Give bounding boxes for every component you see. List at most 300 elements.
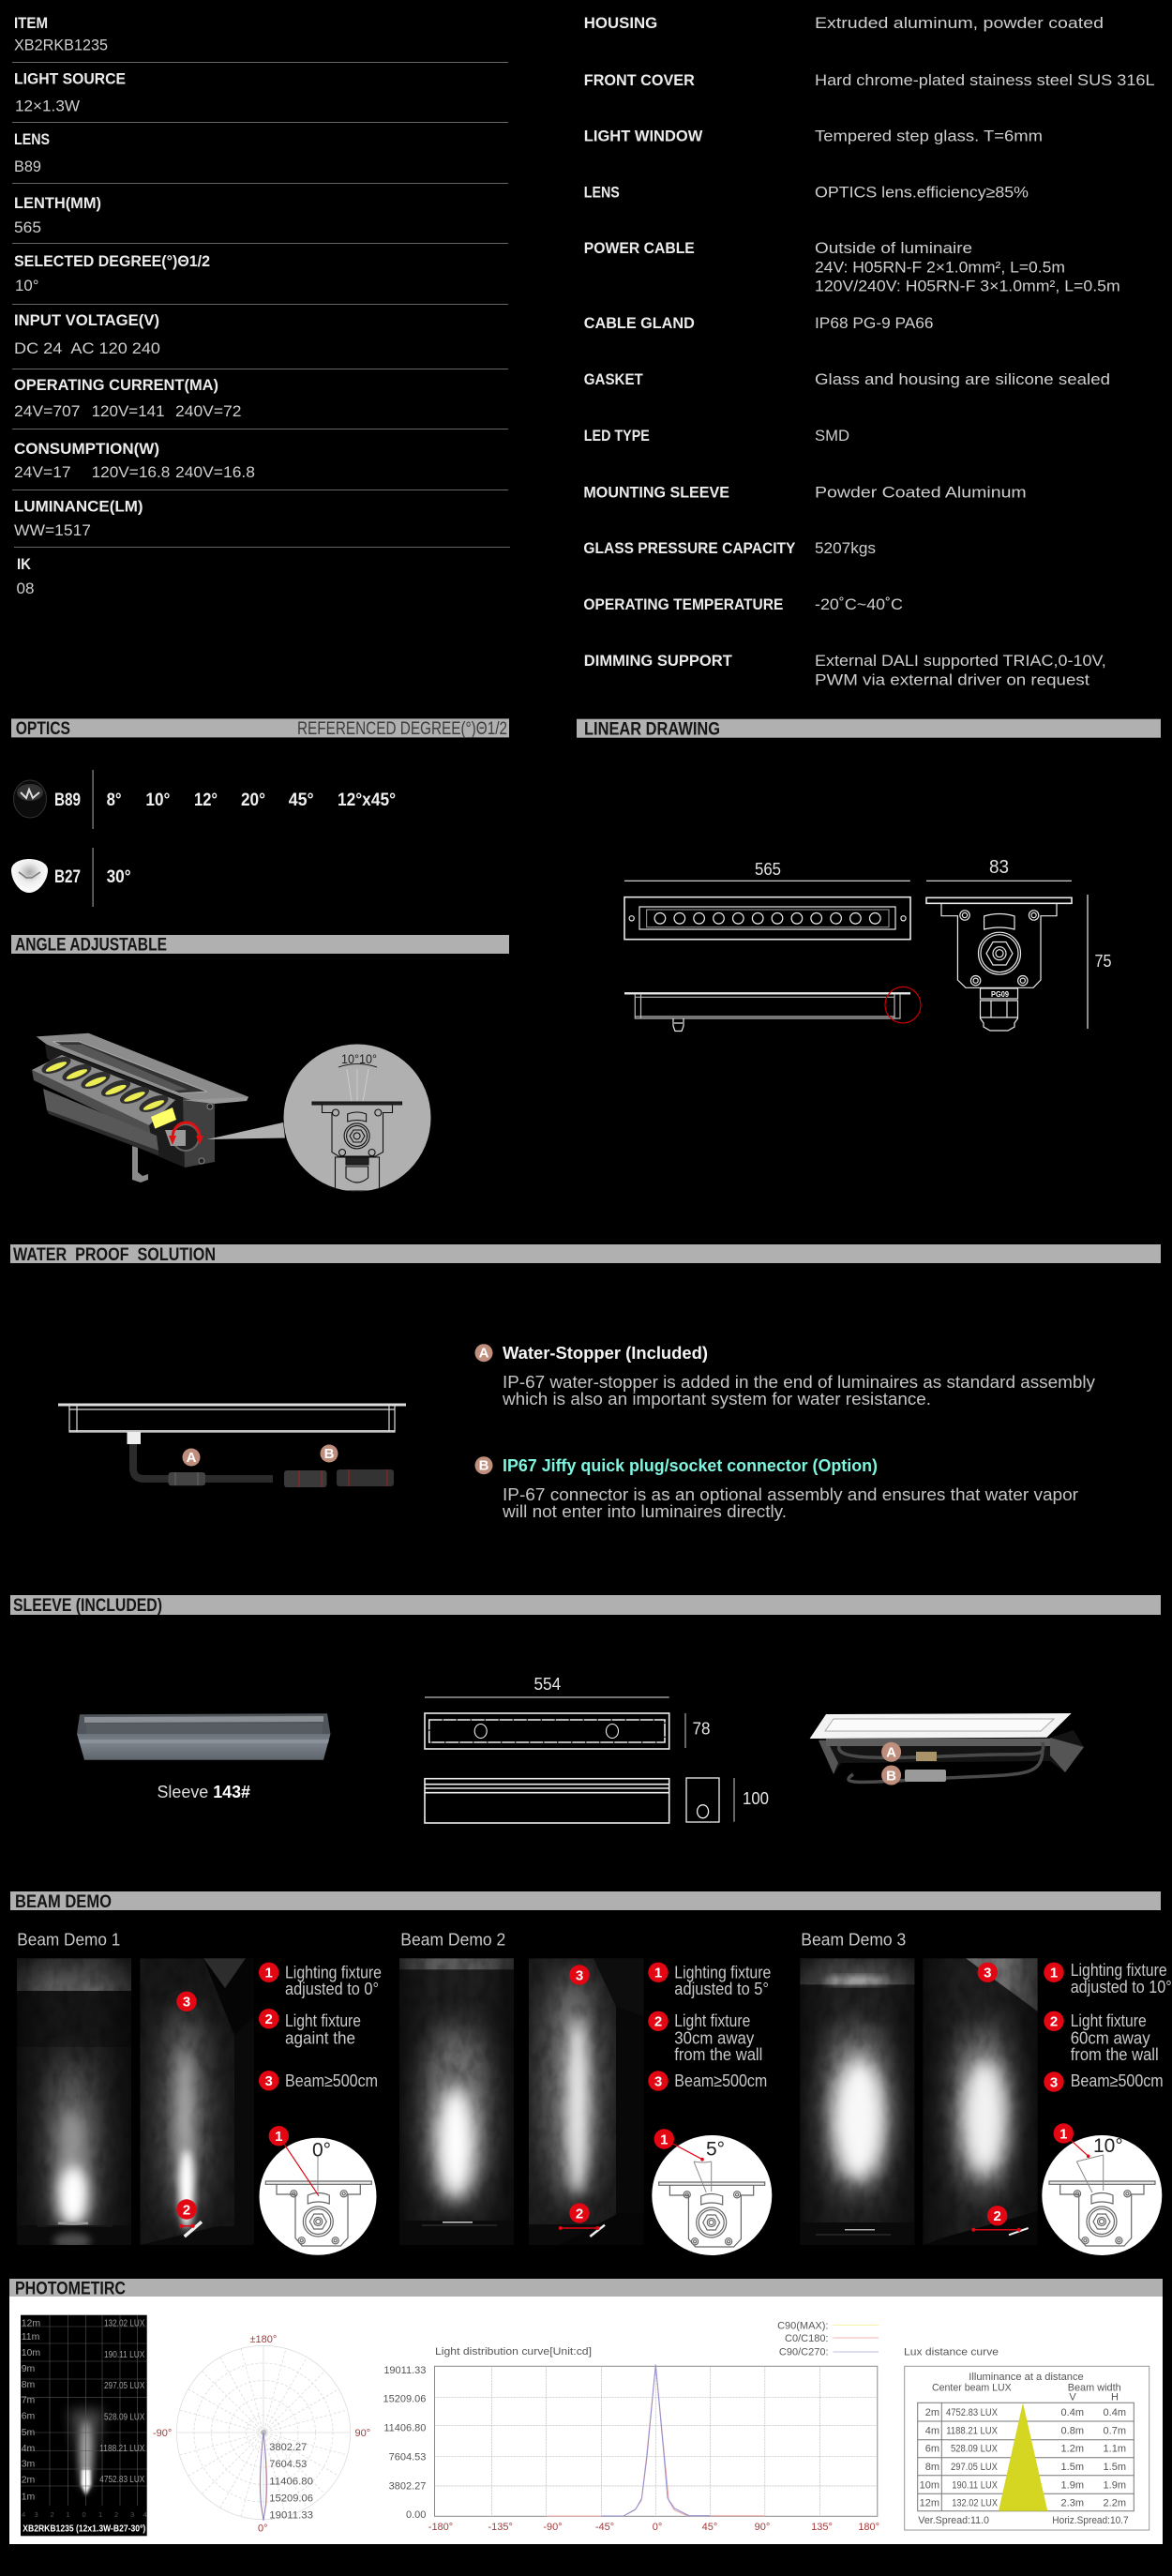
chart: lux distance curve: Beam width <box>1068 2382 1121 2393</box>
B89 angles <box>107 791 396 810</box>
chart: light distribution curve: 0° <box>653 2522 662 2533</box>
bullet 3: 3 <box>265 2073 273 2089</box>
callout: detail circle <box>283 1045 431 1191</box>
callout: angle dial 0 degrees: 1 <box>275 2129 282 2145</box>
B89 angles: 45° <box>289 791 314 810</box>
heading: Beam Demo 1 <box>17 1930 120 1949</box>
bullet 1: Lighting fixture <box>285 1964 382 1982</box>
callout: angle dial 0 degrees <box>259 2126 377 2255</box>
gasket <box>584 370 1110 388</box>
lux table values: 1.9m <box>1061 2479 1084 2491</box>
heading bar: beam demo <box>10 1891 1161 1912</box>
photo: front wall <box>399 1958 514 2245</box>
led type <box>584 427 849 444</box>
B89 angles: 8° <box>107 791 122 810</box>
chart: light distribution curve: -45° <box>595 2522 614 2533</box>
operating temperature <box>583 595 903 613</box>
ik <box>17 555 34 597</box>
chart: beam spread image: 132.02 LUX <box>104 2318 144 2329</box>
lux table values: 2.2m <box>1104 2498 1126 2509</box>
callout: angle dial 5 degrees: 5° <box>706 2138 725 2161</box>
length <box>14 194 101 236</box>
dimension: 100: 100 <box>743 1789 769 1808</box>
cable gland <box>584 314 934 332</box>
photo: front wall <box>17 1958 131 2250</box>
drawing: side view <box>624 987 921 1032</box>
photo: side wall <box>140 1958 254 2245</box>
lux table values <box>920 2407 1126 2509</box>
chart: lux distance curve: V <box>1069 2392 1076 2403</box>
bullet 2 <box>648 2011 762 2064</box>
heading bar: sleeve <box>10 1595 1161 1616</box>
bullet 2: 2 <box>654 2014 662 2030</box>
chart: light distribution curve <box>383 2320 879 2533</box>
heading bar: optics <box>11 718 509 739</box>
legend: C0/C180: <box>785 2333 829 2344</box>
lux table values: 4m <box>925 2425 939 2436</box>
chart: beam spread image: 6m <box>22 2410 36 2421</box>
bullet 3 <box>1044 2071 1164 2092</box>
bullet 2: 30cm away <box>674 2028 754 2047</box>
chart: lux distance curve: H <box>1111 2392 1119 2403</box>
housing <box>584 14 1104 32</box>
chart: beam spread image: 9m <box>22 2363 36 2374</box>
chart: lux distance curve: Lux distance curve <box>904 2346 999 2358</box>
bullet 2: againt the <box>285 2028 355 2047</box>
heading bar: angle adjustable: ANGLE ADJUSTABLE <box>15 936 167 955</box>
chart: light distribution curve: 135° <box>811 2522 833 2533</box>
dimension: 554: 554 <box>534 1675 561 1694</box>
item B: quick plug connector: B <box>479 1457 489 1474</box>
chart: light distribution curve: -180° <box>428 2522 453 2533</box>
chart: light distribution curve: 45° <box>702 2522 717 2533</box>
ik: 08 <box>17 580 34 597</box>
chart: polar distribution: 0° <box>258 2523 268 2534</box>
luminance: WW=1517 <box>14 521 91 539</box>
lux table values: 1.2m <box>1061 2444 1084 2455</box>
heading bar: photometric <box>9 2279 1163 2299</box>
badge A <box>182 1448 201 1467</box>
glass pressure capacity: 5207kgs <box>815 539 876 557</box>
chart: beam spread image <box>21 2315 147 2536</box>
cable gland: IP68 PG-9 PA66 <box>815 314 934 332</box>
lux table values: 12m <box>920 2498 939 2509</box>
icon: fixture 3D view <box>32 1033 248 1183</box>
dimension: 78: 78 <box>692 1720 711 1739</box>
photo: side wall <box>923 1958 1038 2245</box>
bullet 2: 2 <box>1050 2014 1058 2030</box>
length: 565 <box>14 218 41 236</box>
lens <box>584 184 1029 201</box>
badge A: A <box>886 1744 896 1761</box>
dimming support: External DALI supported TRIAC,0-10V, <box>815 652 1106 670</box>
image: assembled fixture in sleeve <box>810 1713 1084 1785</box>
photo markers: 2 <box>576 2206 583 2222</box>
operating current: OPERATING CURRENT(MA) <box>14 376 218 394</box>
drawing: section view <box>926 897 1072 1031</box>
chart: light distribution curve: 11406.80 <box>383 2422 426 2433</box>
chart: light distribution curve: 19011.33 <box>383 2365 426 2376</box>
consumption: 24V=17 <box>14 463 71 481</box>
heading bar: photometric: PHOTOMETIRC <box>15 2279 126 2299</box>
operating temperature: -20˚C~40˚C <box>815 595 903 613</box>
light source <box>14 69 126 114</box>
callout: angle dial 10 degrees: 1 <box>1059 2126 1067 2142</box>
lux table values: 0.4m <box>1104 2407 1126 2418</box>
item A: water stopper: Water-Stopper (Included) <box>503 1344 708 1363</box>
lux table values: 2m <box>925 2407 939 2418</box>
operating temperature: OPERATING TEMPERATURE <box>583 595 783 613</box>
lux table values: 10m <box>920 2479 939 2491</box>
item A: water stopper: A <box>479 1345 489 1362</box>
length: LENTH(MM) <box>14 194 101 212</box>
photo markers <box>569 1965 590 2223</box>
chart: beam spread image: 2m <box>22 2474 36 2485</box>
selected degree: SELECTED DEGREE(°)Θ1/2 <box>14 252 210 270</box>
bullet 1 <box>648 1963 771 1998</box>
heading bar: beam demo: BEAM DEMO <box>15 1892 112 1912</box>
photo markers: 3 <box>576 1967 583 1983</box>
chart: polar distribution: 15209.06 <box>269 2493 313 2505</box>
lux table values: 2.3m <box>1061 2498 1084 2509</box>
item B: quick plug connector: will not enter into luminaires directly. <box>502 1502 787 1521</box>
selected degree <box>14 252 210 294</box>
chart: beam spread image: 2 <box>51 2510 54 2519</box>
bullet 3: 3 <box>654 2073 662 2089</box>
light window <box>584 128 1043 144</box>
drawing: sleeve side <box>425 1779 669 1823</box>
item B: quick plug connector <box>474 1456 1078 1521</box>
lux table values: 1.1m <box>1104 2444 1126 2455</box>
badge B: B <box>886 1769 896 1784</box>
panel: basic parameters <box>12 14 510 597</box>
dimming support <box>584 652 1106 688</box>
chart: light distribution curve: -135° <box>488 2522 513 2533</box>
badge B: B <box>324 1446 335 1462</box>
bullet 1: adjusted to 5° <box>674 1980 769 1998</box>
consumption: 240V=16.8 <box>175 463 255 481</box>
front cover: Hard chrome-plated stainess steel SUS 316L <box>815 71 1155 89</box>
chart: polar distribution: 11406.80 <box>269 2476 313 2487</box>
light source: LIGHT SOURCE <box>14 69 126 88</box>
power cable: Outside of luminaire <box>815 239 972 257</box>
dimension: 78 <box>685 1713 711 1748</box>
callout: angle dial 0 degrees: 0° <box>312 2140 331 2161</box>
mounting sleeve <box>583 484 1027 501</box>
photo markers <box>176 1992 197 2220</box>
photo: side wall <box>529 1958 644 2245</box>
heading bar: optics: OPTICS <box>16 719 70 739</box>
chart: beam spread image: 4 <box>22 2510 25 2519</box>
chart: polar distribution: 7604.53 <box>269 2459 307 2470</box>
lux table values: 1188.21 LUX <box>946 2425 999 2436</box>
chart: polar distribution <box>153 2334 370 2534</box>
chart: beam spread image: 528.09 LUX <box>104 2412 144 2423</box>
item A: water stopper: IP-67 water-stopper is added in the end of luminaires as standard assembly <box>503 1373 1095 1392</box>
consumption: 120V=16.8 <box>92 463 170 481</box>
panel: sleeve <box>77 1675 1084 1823</box>
bullet 2: 60cm away <box>1071 2028 1150 2047</box>
bullet 2: Light fixture <box>674 2011 750 2030</box>
chart: polar distribution: 19011.33 <box>269 2510 313 2522</box>
operating current <box>14 376 242 420</box>
chart: lux distance curve: Illuminance at a distance <box>969 2372 1084 2383</box>
chart: beam spread image: 4m <box>22 2443 36 2454</box>
operating current: 240V=72 <box>175 402 242 420</box>
bullet 3: Beam≥500cm <box>1071 2071 1164 2090</box>
badge B <box>881 1765 901 1785</box>
heading bar: optics: REFERENCED DEGREE(°)Θ1/2 <box>297 719 507 739</box>
chart: beam spread image: 1 <box>66 2510 70 2519</box>
dimension: 83: 83 <box>989 857 1009 878</box>
dimming support: DIMMING SUPPORT <box>584 652 732 670</box>
photo markers: 3 <box>183 1995 190 2011</box>
bullet 1: 1 <box>654 1966 662 1981</box>
B89 angles: 20° <box>241 791 265 810</box>
bullet 1: 1 <box>1050 1966 1058 1981</box>
lux table values: 0.4m <box>1061 2407 1084 2418</box>
operating current: 120V=141 <box>92 402 165 420</box>
panel: linear drawing <box>624 857 1112 1032</box>
consumption: CONSUMPTION(W) <box>14 440 159 458</box>
chart: beam spread image: 3 <box>130 2510 134 2519</box>
input voltage: DC 24 AC 120 240 <box>14 339 160 357</box>
chart: beam spread image: 2 <box>114 2510 118 2519</box>
callout: angle dial 5 degrees <box>652 2129 772 2255</box>
front cover: FRONT COVER <box>584 71 695 89</box>
bullet 2: 2 <box>265 2011 273 2027</box>
lux table values: 4752.83 LUX <box>946 2407 999 2418</box>
bullet 1: adjusted to 0° <box>285 1980 379 1998</box>
power cable <box>584 239 1120 294</box>
legend: C90/C270: <box>779 2347 829 2358</box>
item: XB2RKB1235 <box>14 36 108 54</box>
input voltage: INPUT VOLTAGE(V) <box>14 311 159 329</box>
selected degree: 10° <box>15 277 39 294</box>
light window: LIGHT WINDOW <box>584 128 703 144</box>
chart: beam spread image: 4752.83 LUX <box>99 2474 144 2485</box>
photo: front wall <box>800 1958 914 2245</box>
lens: LENS <box>584 184 620 201</box>
chart: beam spread image: 190.11 LUX <box>104 2349 144 2360</box>
dimension: 565: 565 <box>755 860 781 879</box>
lux table values: 190.11 LUX <box>952 2479 999 2491</box>
lux table values: 1.5m <box>1061 2462 1084 2473</box>
chart: polar distribution: -90° <box>153 2428 172 2439</box>
chart: beam spread image: 1188.21 LUX <box>99 2443 144 2454</box>
bullet 2: from the wall <box>674 2045 762 2064</box>
chart: beam spread image: 8m <box>22 2379 36 2390</box>
front cover <box>584 71 1155 89</box>
power cable: 120V/240V: H05RN-F 3×1.0mm², L=0.5m <box>815 278 1120 294</box>
consumption <box>14 440 255 481</box>
chart: beam spread image: 5m <box>22 2427 36 2438</box>
panel: angle adjustable fixture <box>32 1033 431 1191</box>
panel: beam demo 2 <box>399 1930 772 2255</box>
photo markers: 2 <box>994 2208 1001 2224</box>
B89 angles: 12°x45° <box>338 791 396 810</box>
callout: angle dial 5 degrees: 1 <box>660 2132 668 2147</box>
bullet 1: Lighting fixture <box>674 1964 771 1982</box>
heading bar: water proof solution: WATER PROOF SOLUTION <box>13 1245 216 1265</box>
glass pressure capacity: GLASS PRESSURE CAPACITY <box>583 539 796 557</box>
panel: optics table <box>11 770 396 907</box>
chart: polar distribution: 3802.27 <box>269 2442 307 2453</box>
lens: OPTICS lens.efficiency≥85% <box>815 184 1029 201</box>
callout: angle dial 10 degrees: 10° <box>1093 2135 1123 2157</box>
chart: beam spread image: 4 <box>143 2510 147 2519</box>
chart: beam spread image: XB2RKB1235 (12x1.3W-B27-30°) <box>23 2524 145 2534</box>
housing: HOUSING <box>584 14 657 32</box>
chart: beam spread image: 3m <box>22 2459 36 2470</box>
gasket: Glass and housing are silicone sealed <box>815 370 1110 388</box>
operating current: 24V=707 <box>14 402 81 420</box>
bullet 3 <box>259 2071 378 2090</box>
chart: light distribution curve: 7604.53 <box>389 2451 426 2463</box>
sleeve caption: Sleeve 143# <box>158 1783 250 1801</box>
B27 label: B27 <box>54 867 81 887</box>
drawing: front view <box>624 897 910 940</box>
luminance <box>14 497 143 539</box>
item B: quick plug connector: IP67 Jiffy quick plug/socket connector (Option) <box>503 1456 878 1475</box>
B89 angles: 12° <box>194 791 218 810</box>
bullet 3: Beam≥500cm <box>674 2071 767 2090</box>
panel: beam demo 3 <box>800 1930 1172 2255</box>
heading: Beam Demo 3 <box>801 1930 906 1949</box>
heading bar: sleeve: SLEEVE (INCLUDED) <box>13 1596 162 1616</box>
chart: lux distance curve: Center beam LUX <box>932 2382 1012 2393</box>
lux table values: 1.9m <box>1104 2479 1126 2491</box>
connector brass <box>916 1752 937 1761</box>
dimension: 100 <box>734 1778 769 1822</box>
drawing: fixture with connectors <box>58 1405 406 1487</box>
item A: water stopper: which is also an important system for water resistance. <box>502 1390 931 1409</box>
mounting sleeve: MOUNTING SLEEVE <box>583 484 729 501</box>
panel: beam demo 1 <box>17 1930 382 2255</box>
bullet 3: 3 <box>1050 2074 1058 2090</box>
bullet 2: from the wall <box>1071 2045 1159 2064</box>
badge A: A <box>187 1450 197 1466</box>
chart: lux distance curve <box>904 2346 1149 2530</box>
panel: material specification <box>583 14 1155 688</box>
chart: beam spread image: 7m <box>22 2395 36 2406</box>
chart: light distribution curve: 15209.06 <box>383 2394 426 2405</box>
dimension: 75: 75 <box>1095 952 1112 971</box>
drawing: sleeve top <box>425 1713 669 1749</box>
bullet 1 <box>1044 1961 1172 1996</box>
chart: light distribution curve: -90° <box>543 2522 563 2533</box>
chart: beam spread image: 1 <box>98 2510 102 2519</box>
arrow: rotation <box>169 1122 203 1145</box>
legend <box>777 2320 879 2358</box>
connector steel <box>905 1770 946 1782</box>
photo markers: 3 <box>984 1966 991 1981</box>
led type: LED TYPE <box>584 427 650 444</box>
lux table values: 8m <box>925 2462 939 2473</box>
housing: Extruded aluminum, powder coated <box>815 14 1104 32</box>
lux table values: 1.5m <box>1104 2462 1126 2473</box>
lux table values: 132.02 LUX <box>952 2498 999 2509</box>
bullet 2: Light fixture <box>1071 2011 1147 2030</box>
light source: 12×1.3W <box>15 98 80 114</box>
bullet 1 <box>259 1963 382 1998</box>
gasket: GASKET <box>584 370 643 388</box>
item: ITEM <box>14 14 48 32</box>
chart: polar distribution: 90° <box>354 2428 370 2439</box>
chart: beam spread image: 12m <box>22 2318 40 2329</box>
heading bar: angle adjustable <box>11 935 509 955</box>
icon: B89 lens <box>13 780 47 818</box>
mounting sleeve: Powder Coated Aluminum <box>815 484 1027 501</box>
photo markers: 2 <box>183 2202 190 2218</box>
heading bar: water proof solution <box>10 1244 1161 1265</box>
callout: angle dial 10 degrees <box>1042 2123 1162 2255</box>
chart: lux distance curve: Ver.Spread:11.0 <box>918 2515 989 2526</box>
chart: light distribution curve: 3802.27 <box>389 2480 426 2492</box>
luminance: LUMINANCE(LM) <box>14 497 143 516</box>
image: sleeve box <box>77 1713 330 1760</box>
bullet 3: Beam≥500cm <box>285 2071 378 2090</box>
chart: beam spread image: 11m <box>22 2331 40 2343</box>
heading bar: linear drawing <box>577 719 1161 739</box>
chart: beam spread image: 3 <box>34 2510 38 2519</box>
power cable: POWER CABLE <box>584 239 695 257</box>
bullet 2 <box>1044 2011 1159 2064</box>
bullet 3 <box>648 2071 767 2091</box>
lens <box>14 130 50 175</box>
chart: beam spread image: 297.05 LUX <box>104 2380 144 2391</box>
connector B <box>284 1469 394 1487</box>
lux table values: 6m <box>925 2444 939 2455</box>
panel: photometric <box>9 2297 1163 2544</box>
chart: light distribution curve: Light distribution curve[Unit:cd] <box>435 2346 592 2358</box>
badge B <box>321 1444 338 1463</box>
lens: B89 <box>14 158 41 175</box>
heading: Beam Demo 2 <box>400 1930 505 1949</box>
lux table values: 297.05 LUX <box>951 2462 999 2473</box>
item B: quick plug connector: IP-67 connector is as an optional assembly and ensures that water vapor <box>503 1485 1078 1504</box>
bullet 2: Light fixture <box>285 2011 361 2030</box>
lux table values: 0.8m <box>1061 2425 1084 2436</box>
legend: C90(MAX): <box>777 2320 829 2331</box>
chart: beam spread image: 1m <box>22 2491 36 2502</box>
connector A <box>169 1472 205 1485</box>
B89 angles: 10° <box>145 791 170 810</box>
chart: beam spread image: 0 <box>83 2510 86 2519</box>
input voltage <box>14 311 160 357</box>
lux table values: 0.7m <box>1104 2425 1126 2436</box>
panel: water proof solution <box>58 1344 1095 1521</box>
chart: light distribution curve: 0.00 <box>406 2509 426 2521</box>
icon: B27 lens <box>11 859 48 893</box>
cable gland: CABLE GLAND <box>584 314 695 332</box>
B89 label: B89 <box>54 791 81 810</box>
dimming support: PWM via external driver on request <box>815 671 1089 688</box>
badge A <box>881 1742 901 1762</box>
chart: polar distribution: ±180° <box>249 2334 277 2345</box>
lens: LENS <box>14 130 50 148</box>
item <box>14 14 108 54</box>
photo markers <box>978 1963 1007 2225</box>
item A: water stopper <box>474 1344 1095 1409</box>
chart: light distribution curve: 180° <box>858 2522 879 2533</box>
chart: beam spread image: 10m <box>22 2347 40 2358</box>
light window: Tempered step glass. T=6mm <box>815 128 1043 144</box>
bullet 2 <box>259 2009 361 2047</box>
beam triangle <box>999 2403 1047 2511</box>
callout: detail circle: 10°10° <box>341 1051 377 1066</box>
callout wedge <box>207 1122 285 1139</box>
